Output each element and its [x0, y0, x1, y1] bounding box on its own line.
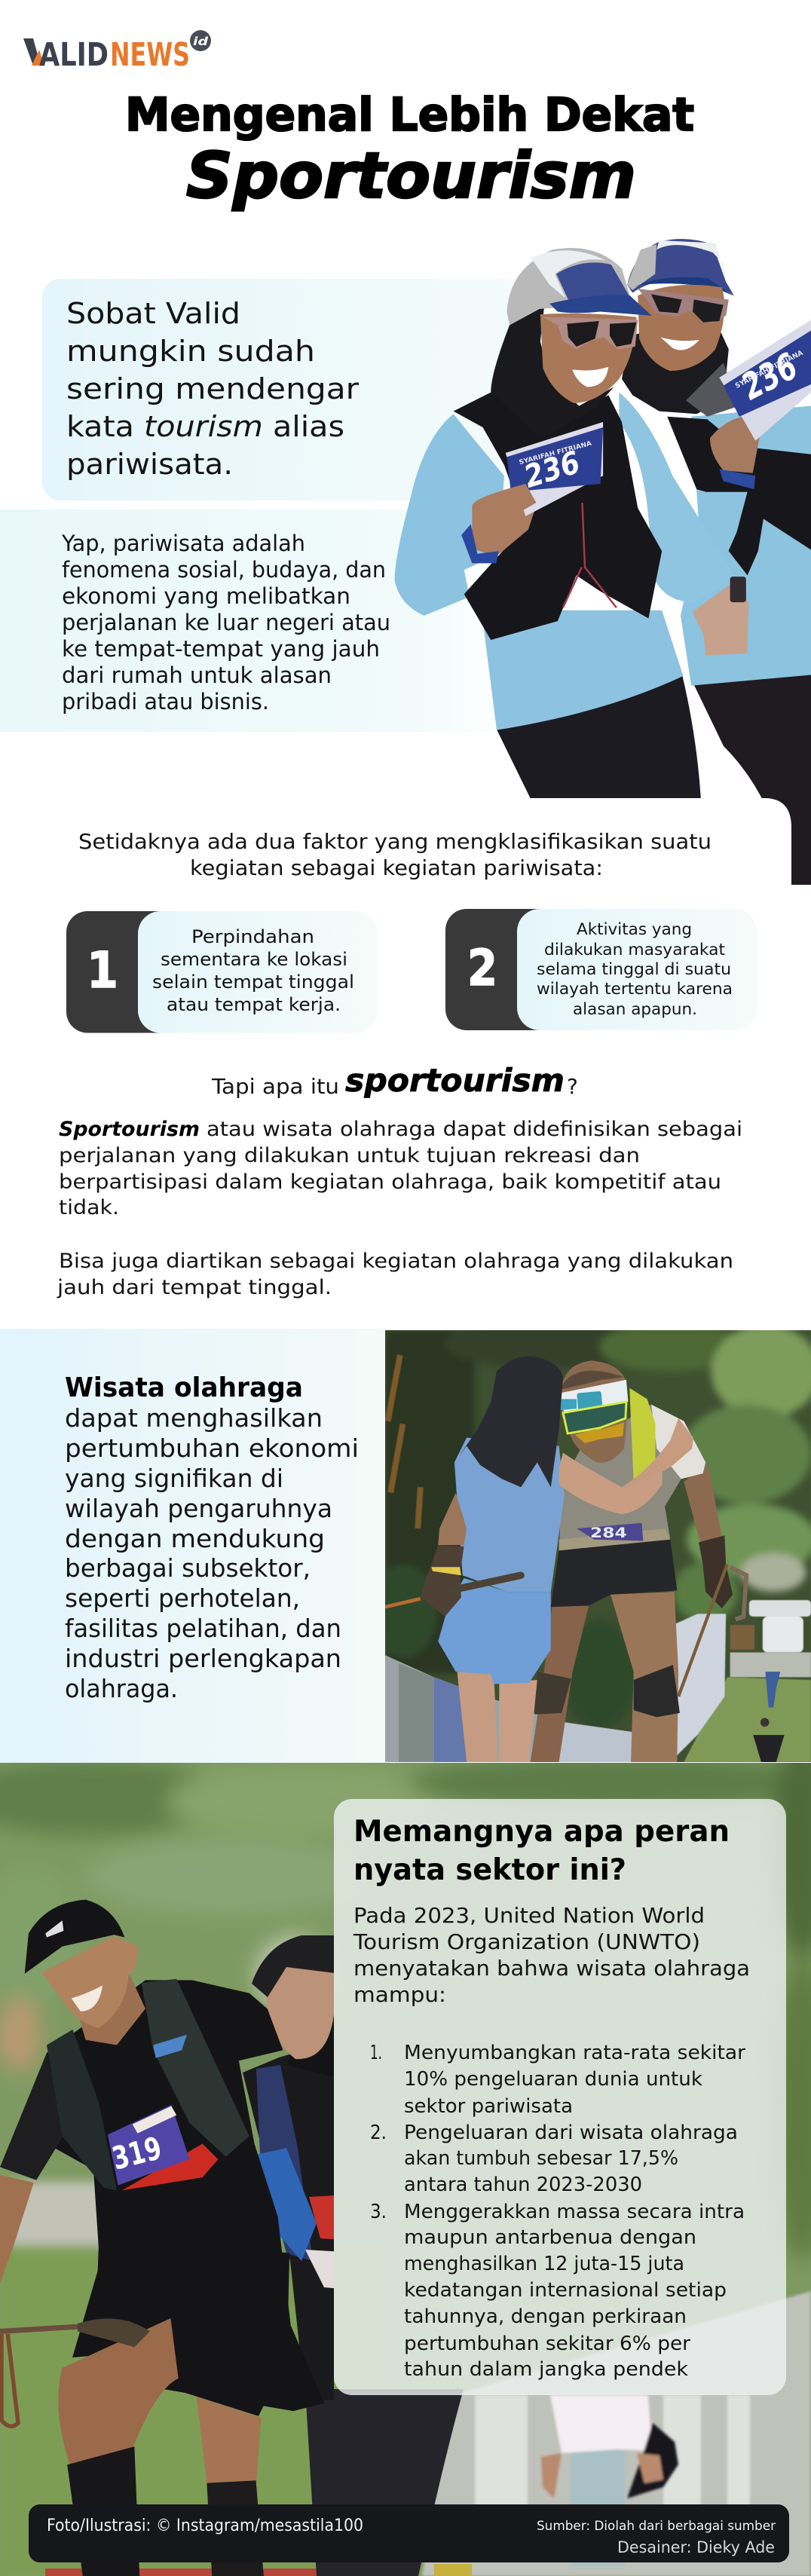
paragraph: definition of sportourism: [57, 1118, 742, 1299]
heading: what is sportourism: [211, 1062, 578, 1099]
definition text: ekonomi yang melibatkan: [62, 583, 350, 609]
parked cars: [730, 1600, 811, 1653]
body text: dengan mendukung: [65, 1524, 325, 1553]
list item 2: antara tahun 2023-2030: [404, 2174, 642, 2196]
woman leggings: [305, 2389, 464, 2576]
list item 3: [370, 2201, 745, 2381]
white fence: [422, 2291, 811, 2576]
intro text: [66, 297, 359, 481]
designer: Desainer: Dieky Ade: [617, 2538, 775, 2556]
card: factor 2: alasan apapun.: [573, 1000, 697, 1018]
body text: [65, 1403, 359, 1703]
definition text: [61, 531, 390, 714]
list item 1: sektor pariwisata: [404, 2095, 573, 2118]
list item 1: 1.: [370, 2042, 382, 2064]
woman: [243, 1935, 377, 2400]
back runner: SYARIFAH FITRIANA: [734, 348, 805, 390]
card: factor 2: selama tinggal di suatu: [537, 960, 731, 978]
panel: Wisata olahraga: [0, 1329, 385, 1763]
title: [125, 88, 694, 213]
definition text: perjalanan ke luar negeri atau: [62, 610, 390, 635]
definition text: ke tempat-tempat yang jauh: [62, 636, 380, 662]
panel: definition of tourism: [0, 509, 513, 732]
girl: [421, 1357, 693, 1762]
man: 319: [109, 2130, 165, 2177]
trekking poles: [385, 1565, 746, 1696]
heading: nyata sektor ini?: [353, 1853, 626, 1887]
paragraph: definition of sportourism: jauh dari tempat tinggal.: [57, 1276, 332, 1299]
definition text: pribadi atau bisnis.: [62, 689, 269, 714]
paragraph: definition of sportourism: Sportourism: [59, 1118, 200, 1141]
intro paragraph: menyatakan bahwa wisata olahraga: [353, 1956, 750, 1981]
definition text: fenomena sosial, budaya, dan: [62, 557, 386, 583]
photo: girl hugging muddy runner: [372, 1319, 811, 1762]
photo: two runners at finish, full width: [0, 1733, 811, 2576]
road and grass: [730, 1653, 811, 1677]
source: Sumber: Diolah dari berbagai sumber: [537, 2519, 776, 2534]
front runner: 236: [520, 444, 584, 495]
list item 2: Pengeluaran dari wisata olahraga: [404, 2122, 738, 2144]
intro paragraph: Pada 2023, United Nation World: [353, 1903, 705, 1928]
heading: what is sportourism: sportourism: [345, 1062, 565, 1099]
body text: yang signifikan di: [65, 1464, 283, 1493]
intro paragraph: [353, 1903, 750, 2007]
photo: two runners holding race bibs: [395, 239, 811, 889]
list item 3: menghasilkan 12 juta-15 juta: [404, 2253, 684, 2275]
bamboo stems: [388, 1355, 421, 1528]
front runner: SYARIFAH FITRIANA: [519, 440, 593, 467]
intro text: sering mendengar: [66, 372, 359, 405]
man: [0, 1900, 325, 2411]
intro text: Sobat Valid: [66, 297, 240, 330]
grass: [0, 2251, 338, 2574]
list item 2: akan tumbuh sebesar 17,5%: [404, 2147, 678, 2170]
heading: [353, 1815, 730, 1887]
definition text: dari rumah untuk alasan: [62, 662, 332, 688]
title: Mengenal Lebih Dekat: [125, 88, 694, 142]
intro text: pariwisata.: [66, 448, 233, 481]
paragraph: definition of sportourism: atau wisata olahraga dapat didefinisikan sebagai: [207, 1118, 742, 1141]
heading: Memangnya apa peran: [353, 1815, 730, 1849]
leggings: front runner: [497, 675, 701, 800]
man shorts and legs: [0, 2242, 289, 2576]
list item 3: 3.: [370, 2201, 387, 2223]
body text: fasilitas pelatihan, dan: [65, 1614, 341, 1643]
paragraph: definition of sportourism: Bisa juga diartikan sebagai kegiatan olahraga yang dilakukan: [59, 1250, 733, 1273]
list item 3: kedatangan internasional setiap: [404, 2279, 727, 2302]
leggings: back runner: [693, 666, 811, 889]
list item 1: 10% pengeluaran dunia untuk: [404, 2068, 702, 2091]
runner: 284: [590, 1525, 627, 1541]
heading: Wisata olahraga: [65, 1372, 303, 1403]
photo credit: Foto/Ilustrasi: © Instagram/mesastila100: [47, 2516, 363, 2535]
card: factor 1: selain tempat tinggal: [152, 971, 354, 993]
list item 3: maupun antarbenua dengan: [404, 2226, 696, 2249]
heading: what is sportourism: Tapi apa itu: [211, 1074, 339, 1099]
card: factor 1: Perpindahan: [191, 926, 314, 947]
panel: intro callout: [42, 279, 525, 500]
list item 2: [370, 2122, 738, 2196]
list item 3: tahun dalam jangka pendek: [404, 2358, 688, 2381]
logo: Validnews.id: [23, 30, 211, 74]
card: factor 2: dilakukan masyarakat: [544, 941, 725, 959]
logo: Validnews.id: NEWS: [110, 36, 190, 74]
footer credits bar: [29, 2504, 789, 2562]
intro paragraph: Tourism Organization (UNWTO): [353, 1929, 700, 1954]
card: factor 2: [445, 909, 757, 1030]
body text: wilayah pengaruhnya: [65, 1494, 332, 1523]
runner: [531, 1360, 733, 1762]
panel: real role of this sector: [334, 1799, 786, 2395]
card: factor 2: Aktivitas yang: [577, 920, 692, 938]
intro text: kata tourism alias: [66, 410, 344, 443]
paragraph: definition of sportourism: perjalanan yang dilakukan untuk tujuan rekreasi dan: [59, 1144, 640, 1167]
intro to two factors: [78, 829, 712, 880]
body text: olahraga.: [65, 1674, 178, 1703]
card: factor 1: atau tempat kerja.: [167, 994, 341, 1015]
list item 3: tahunnya, dengan perkiraan: [404, 2305, 687, 2328]
logo: Validnews.id: id: [193, 35, 208, 48]
card: factor 2: wilayah tertentu karena: [537, 980, 733, 998]
list item 2: 2.: [370, 2122, 387, 2144]
body text: seperti perhotelan,: [65, 1583, 300, 1613]
intro paragraph: mampu:: [353, 1982, 446, 2007]
front runner: [395, 248, 748, 730]
intro text: mungkin sudah: [66, 335, 315, 368]
body text: dapat menghasilkan: [65, 1403, 323, 1433]
red track and shoe: [45, 2568, 339, 2576]
card: factor 1: 1: [87, 941, 118, 999]
card: factor 1: [66, 911, 378, 1033]
logo: Validnews.id: ALID: [39, 36, 109, 74]
distant runners: [765, 1672, 780, 1708]
intro to two factors: Setidaknya ada dua faktor yang mengklasifikasikan suatu: [78, 829, 712, 854]
list item 1: Menyumbangkan rata-rata sekitar: [404, 2042, 745, 2064]
card: factor 1: sementara ke lokasi: [161, 949, 347, 970]
paragraph: definition of sportourism: berpartisipasi dalam kegiatan olahraga, baik kompetitif atau: [59, 1170, 721, 1194]
heading: what is sportourism: ?: [567, 1074, 578, 1099]
body text: industri perlengkapan: [65, 1644, 341, 1673]
title: Sportourism: [186, 139, 636, 213]
body text: pertumbuhan ekonomi: [65, 1433, 359, 1463]
fence banners: [385, 1655, 632, 1762]
back runner: [622, 239, 811, 686]
list item 3: pertumbuhan sekitar 6% per: [404, 2333, 690, 2355]
background walker: [541, 2395, 678, 2566]
paragraph: definition of sportourism: tidak.: [59, 1196, 119, 1219]
list item 1: [370, 2042, 745, 2118]
body text: berbagai subsektor,: [65, 1553, 311, 1583]
panel: white content sheet: [0, 798, 811, 1329]
list item 3: Menggerakkan massa secara intra: [404, 2201, 745, 2223]
card: factor 2: 2: [467, 939, 497, 997]
road: [8, 2182, 121, 2246]
definition text: Yap, pariwisata adalah: [61, 531, 305, 556]
intro to two factors: kegiatan sebagai kegiatan pariwisata:: [190, 855, 603, 880]
